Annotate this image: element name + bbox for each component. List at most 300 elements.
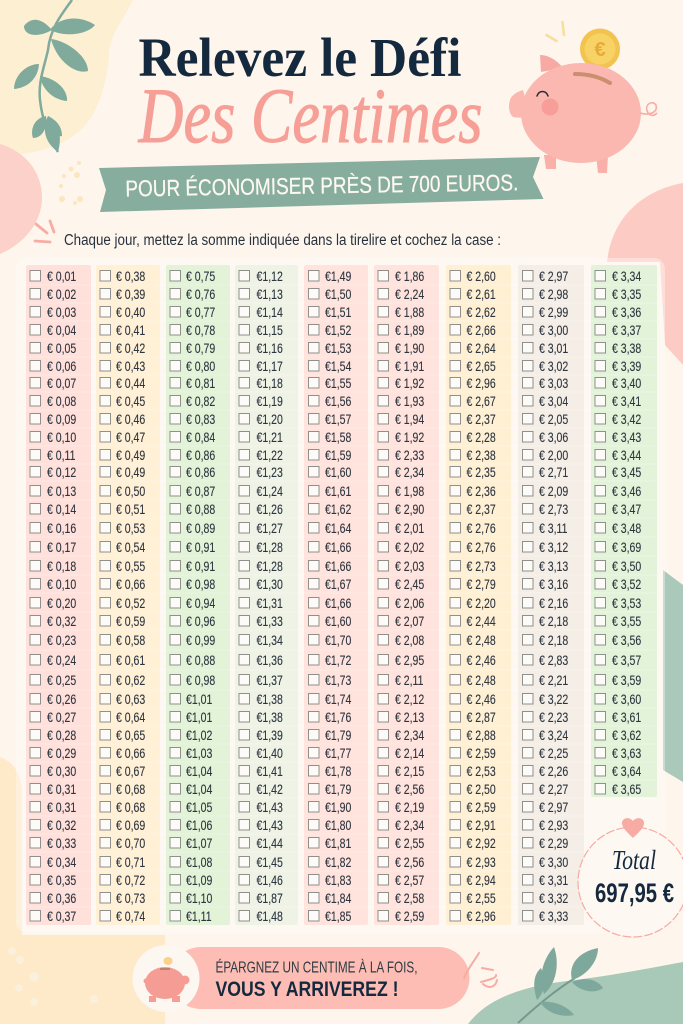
column 7: € 2,53 bbox=[466, 764, 496, 779]
column 2: € 0,42 bbox=[116, 341, 145, 356]
column 3: € 0,84 bbox=[186, 430, 215, 445]
column 1: € 0,33 bbox=[47, 836, 76, 851]
checkboxes column 9 bbox=[595, 270, 606, 794]
column 8: € 2,98 bbox=[539, 287, 568, 302]
column 8: € 3,33 bbox=[539, 909, 568, 924]
column 8: € 2,18 bbox=[539, 633, 568, 648]
column 8: € 3,01 bbox=[539, 341, 568, 356]
column 5: €1,58 bbox=[325, 430, 352, 445]
column 9: € 3,39 bbox=[612, 359, 641, 374]
column 8: € 3,11 bbox=[539, 521, 568, 536]
column 5: €1,66 bbox=[325, 540, 352, 555]
column 8: € 3,22 bbox=[539, 692, 568, 707]
column 4: €1,46 bbox=[256, 873, 283, 888]
column 1: € 0,08 bbox=[47, 394, 76, 409]
column 4: €1,22 bbox=[256, 448, 283, 463]
column 8: € 2,23 bbox=[539, 710, 568, 725]
column 3: € 0,88 bbox=[186, 502, 215, 517]
column 7: € 2,35 bbox=[466, 465, 496, 480]
background blob: top-left yellow bbox=[0, 0, 133, 156]
column 6: € 2,15 bbox=[395, 764, 424, 779]
column 3: €1,09 bbox=[186, 873, 213, 888]
column 5: €1,60 bbox=[325, 465, 352, 480]
column 6: € 2,03 bbox=[395, 559, 424, 574]
column 6: € 2,14 bbox=[395, 746, 424, 761]
column 9: € 3,53 bbox=[612, 596, 641, 611]
column 1: € 0,20 bbox=[47, 596, 76, 611]
column 7: € 2,50 bbox=[466, 782, 496, 797]
column 5: €1,52 bbox=[325, 323, 352, 338]
speckle dots bbox=[8, 947, 98, 1006]
column 4: €1,39 bbox=[256, 728, 283, 743]
column 4: €1,13 bbox=[256, 287, 283, 302]
column 3: € 0,86 bbox=[186, 448, 215, 463]
column 5: €1,79 bbox=[325, 728, 352, 743]
column 6: € 2,12 bbox=[395, 692, 424, 707]
column 2: € 0,41 bbox=[116, 323, 145, 338]
column 9: € 3,48 bbox=[612, 521, 641, 536]
column 7: € 2,20 bbox=[466, 596, 496, 611]
column 7: € 2,88 bbox=[466, 728, 496, 743]
column 5: €1,57 bbox=[325, 412, 352, 427]
column 9: € 3,59 bbox=[612, 673, 641, 688]
column 4: €1,42 bbox=[256, 782, 283, 797]
checkboxes column 2 bbox=[100, 270, 110, 921]
column 1 bbox=[30, 269, 76, 924]
column 7: € 2,87 bbox=[466, 710, 496, 725]
column 5: €1,49 bbox=[325, 269, 352, 284]
column 4: €1,15 bbox=[256, 323, 283, 338]
column 4: €1,27 bbox=[256, 521, 283, 536]
column 1: € 0,07 bbox=[47, 376, 76, 391]
column 6: € 1,92 bbox=[395, 376, 424, 391]
column 4 bbox=[239, 269, 283, 924]
column 2: € 0,66 bbox=[116, 577, 145, 592]
column 6: € 1,89 bbox=[395, 323, 424, 338]
title: Des Centimes: Des Centimes bbox=[138, 72, 482, 159]
column 9: € 3,36 bbox=[612, 305, 641, 320]
column 5: €1,78 bbox=[325, 764, 352, 779]
icon: small piggy in circle bbox=[132, 945, 200, 1012]
column 1: € 0,37 bbox=[47, 909, 76, 924]
column 4: €1,38 bbox=[256, 692, 283, 707]
column 3: €1,08 bbox=[186, 855, 213, 870]
column 6: € 2,57 bbox=[395, 873, 424, 888]
column 4: €1,31 bbox=[256, 596, 283, 611]
column 5: €1,55 bbox=[325, 376, 352, 391]
column 3: € 0,91 bbox=[186, 540, 215, 555]
column 3: €1,07 bbox=[186, 836, 213, 851]
column 6: € 1,94 bbox=[395, 412, 424, 427]
column 2: € 0,46 bbox=[116, 412, 145, 427]
banner ribbon bbox=[99, 157, 544, 212]
column 7: € 2,37 bbox=[466, 502, 496, 517]
column 8: € 3,02 bbox=[539, 359, 568, 374]
column 1: € 0,27 bbox=[47, 710, 76, 725]
column 2: € 0,55 bbox=[116, 559, 145, 574]
column 2: € 0,63 bbox=[116, 692, 145, 707]
column 2: € 0,58 bbox=[116, 633, 145, 648]
column 3: €1,01 bbox=[186, 692, 213, 707]
column 2: € 0,40 bbox=[116, 305, 145, 320]
column 3: €1,10 bbox=[186, 891, 213, 906]
column 7: € 2,60 bbox=[466, 269, 496, 284]
column 9: € 3,34 bbox=[612, 269, 641, 284]
pill text line 1: ÉPARGNEZ UN CENTIME À LA FOIS, bbox=[216, 960, 418, 976]
column 3: € 0,88 bbox=[186, 653, 215, 668]
column 4: €1,23 bbox=[256, 465, 283, 480]
column 9: € 3,42 bbox=[612, 412, 641, 427]
column 6: € 1,88 bbox=[395, 305, 424, 320]
column 5: €1,54 bbox=[325, 359, 352, 374]
column 5: €1,61 bbox=[325, 484, 352, 499]
column 5: €1,81 bbox=[325, 836, 352, 851]
column 1: € 0,30 bbox=[47, 764, 76, 779]
column 7: € 2,66 bbox=[466, 323, 496, 338]
column 8: € 3,03 bbox=[539, 376, 568, 391]
column 7: € 2,37 bbox=[466, 412, 496, 427]
banner text: POUR ÉCONOMISER PRÈS DE 700 EUROS. bbox=[125, 169, 519, 201]
column 7: € 2,79 bbox=[466, 577, 496, 592]
column 6: € 1,93 bbox=[395, 394, 424, 409]
column 5: €1,62 bbox=[325, 502, 352, 517]
column 5: €1,85 bbox=[325, 909, 352, 924]
column 8: € 3,06 bbox=[539, 430, 568, 445]
column 5: €1,72 bbox=[325, 653, 352, 668]
column 7: € 2,62 bbox=[466, 305, 496, 320]
column 7: € 2,96 bbox=[466, 376, 496, 391]
title: Relevez le Défi: Relevez le Défi bbox=[138, 27, 462, 88]
column 8: € 2,27 bbox=[539, 782, 568, 797]
checkboxes column 1 bbox=[30, 270, 40, 921]
column 3 bbox=[170, 269, 215, 924]
column 1: € 0,12 bbox=[47, 465, 76, 480]
column 4: €1,17 bbox=[256, 359, 283, 374]
column 5: €1,73 bbox=[325, 673, 352, 688]
column 5 bbox=[308, 269, 352, 924]
column 1: € 0,36 bbox=[47, 891, 76, 906]
column 2: € 0,51 bbox=[116, 502, 145, 517]
column 5: €1,83 bbox=[325, 873, 352, 888]
column 2: € 0,73 bbox=[116, 891, 145, 906]
column 7: € 2,91 bbox=[466, 818, 496, 833]
column 5: €1,80 bbox=[325, 818, 352, 833]
column 2: € 0,65 bbox=[116, 728, 145, 743]
checkboxes column 6 bbox=[378, 270, 388, 921]
column 6: € 2,11 bbox=[395, 673, 424, 688]
column 5: €1,84 bbox=[325, 891, 352, 906]
checkboxes column 4 bbox=[239, 270, 250, 921]
column 6: € 2,06 bbox=[395, 596, 424, 611]
column 8: € 3,13 bbox=[539, 559, 568, 574]
column 3: € 0,77 bbox=[186, 305, 215, 320]
column 3: € 0,99 bbox=[186, 633, 215, 648]
column 1: € 0,23 bbox=[47, 633, 76, 648]
column 7: € 2,48 bbox=[466, 633, 496, 648]
column 6: € 2,08 bbox=[395, 633, 424, 648]
column 9: € 3,50 bbox=[612, 559, 641, 574]
column 6: € 1,92 bbox=[395, 430, 424, 445]
column 3: € 0,96 bbox=[186, 614, 215, 629]
column 2: € 0,64 bbox=[116, 710, 145, 725]
column 7: € 2,65 bbox=[466, 359, 496, 374]
column 3: € 0,89 bbox=[186, 521, 215, 536]
column 9: € 3,62 bbox=[612, 728, 641, 743]
column 6: € 2,33 bbox=[395, 448, 424, 463]
column 9: € 3,44 bbox=[612, 448, 641, 463]
column 5: €1,82 bbox=[325, 855, 352, 870]
column 4: €1,28 bbox=[256, 540, 283, 555]
icon: pink accent strokes bbox=[35, 221, 54, 242]
background blob: bottom-right teal bbox=[468, 962, 683, 1024]
column 1: € 0,32 bbox=[47, 614, 76, 629]
column 3: € 0,98 bbox=[186, 577, 215, 592]
column 3: €1,04 bbox=[186, 782, 213, 797]
column 9: € 3,35 bbox=[612, 287, 641, 302]
column 6: € 1,98 bbox=[395, 484, 424, 499]
column 5: €1,53 bbox=[325, 341, 352, 356]
column 9: € 3,38 bbox=[612, 341, 641, 356]
column 1: € 0,16 bbox=[47, 521, 76, 536]
column 6: € 2,59 bbox=[395, 909, 424, 924]
column 7: € 2,48 bbox=[466, 673, 496, 688]
column 7: € 2,36 bbox=[466, 484, 496, 499]
column 4: €1,16 bbox=[256, 341, 283, 356]
column 7: € 2,64 bbox=[466, 341, 496, 356]
column 2: € 0,61 bbox=[116, 653, 145, 668]
column 8: € 2,00 bbox=[539, 448, 568, 463]
column 3: € 0,80 bbox=[186, 359, 215, 374]
background blob: right pink bbox=[607, 183, 683, 365]
column 8: € 2,18 bbox=[539, 614, 568, 629]
column 5: €1,50 bbox=[325, 287, 352, 302]
column 3: €1,05 bbox=[186, 800, 213, 815]
column 8: € 2,25 bbox=[539, 746, 568, 761]
column 4: €1,43 bbox=[256, 818, 283, 833]
column 4: €1,26 bbox=[256, 502, 283, 517]
column 4: €1,43 bbox=[256, 800, 283, 815]
column 1: € 0,29 bbox=[47, 746, 76, 761]
column 8: € 3,31 bbox=[539, 873, 568, 888]
column 2: € 0,45 bbox=[116, 394, 145, 409]
column 1: € 0,32 bbox=[47, 818, 76, 833]
column 4: €1,36 bbox=[256, 653, 283, 668]
column 3: € 0,76 bbox=[186, 287, 215, 302]
column 6: € 1,91 bbox=[395, 359, 424, 374]
column 7: € 2,73 bbox=[466, 559, 496, 574]
column 1: € 0,28 bbox=[47, 728, 76, 743]
column 3: € 0,83 bbox=[186, 412, 215, 427]
column 4: €1,87 bbox=[256, 891, 283, 906]
column 7: € 2,93 bbox=[466, 855, 496, 870]
column 2: € 0,70 bbox=[116, 836, 145, 851]
column 1: € 0,05 bbox=[47, 341, 76, 356]
footer pill bbox=[132, 945, 470, 1012]
column 6: € 1,90 bbox=[395, 341, 424, 356]
column 9: € 3,40 bbox=[612, 376, 641, 391]
column 5: €1,67 bbox=[325, 577, 352, 592]
background blob: right teal bbox=[663, 570, 683, 782]
column 6: € 2,34 bbox=[395, 465, 424, 480]
column 3: € 0,98 bbox=[186, 673, 215, 688]
column 1: € 0,26 bbox=[47, 692, 76, 707]
column 2: € 0,66 bbox=[116, 746, 145, 761]
column 3: €1,11 bbox=[186, 909, 212, 924]
column 3: € 0,86 bbox=[186, 465, 215, 480]
column 8: € 3,16 bbox=[539, 577, 568, 592]
column 2: € 0,39 bbox=[116, 287, 145, 302]
column 6: € 2,58 bbox=[395, 891, 424, 906]
column 6: € 2,02 bbox=[395, 540, 424, 555]
column 6: € 2,56 bbox=[395, 782, 424, 797]
column 7: € 2,59 bbox=[466, 800, 496, 815]
column 8: € 2,97 bbox=[539, 800, 568, 815]
column 9: € 3,56 bbox=[612, 633, 641, 648]
column 3: € 0,82 bbox=[186, 394, 215, 409]
column 3: € 0,91 bbox=[186, 559, 215, 574]
column 4: €1,33 bbox=[256, 614, 283, 629]
column 1: € 0,03 bbox=[47, 305, 76, 320]
column 5: €1,60 bbox=[325, 614, 352, 629]
column 9: € 3,65 bbox=[612, 782, 641, 797]
column 5: €1,79 bbox=[325, 782, 352, 797]
column 7: € 2,46 bbox=[466, 653, 496, 668]
column 9 bbox=[595, 269, 641, 797]
total label: Total bbox=[612, 845, 656, 875]
column 4: €1,38 bbox=[256, 710, 283, 725]
column 1: € 0,17 bbox=[47, 540, 76, 555]
column 9: € 3,57 bbox=[612, 653, 641, 668]
column 8: € 3,04 bbox=[539, 394, 568, 409]
column 4: €1,21 bbox=[256, 430, 283, 445]
column 2: € 0,59 bbox=[116, 614, 145, 629]
column 5: €1,66 bbox=[325, 596, 352, 611]
column 1: € 0,01 bbox=[47, 269, 76, 284]
column 5: €1,56 bbox=[325, 394, 352, 409]
column 2 bbox=[100, 269, 145, 924]
column 9: € 3,47 bbox=[612, 502, 641, 517]
column 5: €1,90 bbox=[325, 800, 352, 815]
column 1: € 0,35 bbox=[47, 873, 76, 888]
column 4: €1,19 bbox=[256, 394, 283, 409]
column 4: €1,37 bbox=[256, 673, 283, 688]
column 6: € 2,13 bbox=[395, 710, 424, 725]
column 9: € 3,52 bbox=[612, 577, 641, 592]
column 8 bbox=[522, 269, 568, 924]
column 7: € 2,59 bbox=[466, 746, 496, 761]
column 4: €1,44 bbox=[256, 836, 283, 851]
column 6: € 2,01 bbox=[395, 521, 424, 536]
column 6: € 2,55 bbox=[395, 836, 424, 851]
column 2: € 0,72 bbox=[116, 873, 145, 888]
column 8: € 3,24 bbox=[539, 728, 568, 743]
column 4: €1,18 bbox=[256, 376, 283, 391]
column 7: € 2,76 bbox=[466, 540, 496, 555]
column 6: € 1,86 bbox=[395, 269, 424, 284]
checkboxes column 3 bbox=[170, 270, 180, 921]
column 9: € 3,55 bbox=[612, 614, 641, 629]
column 9: € 3,60 bbox=[612, 692, 641, 707]
column 8: € 2,73 bbox=[539, 502, 568, 517]
column 7: € 2,76 bbox=[466, 521, 496, 536]
column 2: € 0,69 bbox=[116, 818, 145, 833]
column 8: € 2,97 bbox=[539, 269, 568, 284]
coin bbox=[580, 28, 620, 70]
column 4: €1,48 bbox=[256, 909, 283, 924]
column 5: €1,64 bbox=[325, 521, 352, 536]
column 1: € 0,24 bbox=[47, 653, 76, 668]
background blob: left pink bbox=[0, 144, 42, 254]
column 9: € 3,63 bbox=[612, 746, 641, 761]
column 4: €1,20 bbox=[256, 412, 283, 427]
column 5: €1,51 bbox=[325, 305, 352, 320]
column 4: €1,34 bbox=[256, 633, 283, 648]
column 9: € 3,43 bbox=[612, 430, 641, 445]
column 9: € 3,46 bbox=[612, 484, 641, 499]
column 1: € 0,31 bbox=[47, 800, 76, 815]
column 3: € 0,94 bbox=[186, 596, 215, 611]
column 6: € 2,34 bbox=[395, 728, 424, 743]
icon: leaf branch bottom-right bbox=[518, 947, 603, 1023]
column 4: €1,14 bbox=[256, 305, 283, 320]
column 6: € 2,45 bbox=[395, 577, 424, 592]
icon: heart bbox=[622, 818, 644, 838]
icon: leaf branch top-left bbox=[14, 0, 95, 152]
column 2: € 0,68 bbox=[116, 800, 145, 815]
column 3: € 0,78 bbox=[186, 323, 215, 338]
coin: € bbox=[594, 39, 606, 61]
column 7: € 2,96 bbox=[466, 909, 496, 924]
column 2: € 0,53 bbox=[116, 521, 145, 536]
column 2: € 0,47 bbox=[116, 430, 145, 445]
column 8: € 2,16 bbox=[539, 596, 568, 611]
column 2: € 0,54 bbox=[116, 540, 145, 555]
column 6: € 2,24 bbox=[395, 287, 424, 302]
column 8: € 2,83 bbox=[539, 653, 568, 668]
column 2: € 0,62 bbox=[116, 673, 145, 688]
column 4: €1,12 bbox=[256, 269, 283, 284]
column 1: € 0,11 bbox=[47, 448, 76, 463]
column 5: €1,66 bbox=[325, 559, 352, 574]
column 9: € 3,64 bbox=[612, 764, 641, 779]
column 2: € 0,43 bbox=[116, 359, 145, 374]
column 1: € 0,14 bbox=[47, 502, 76, 517]
column 3: €1,06 bbox=[186, 818, 213, 833]
column 7: € 2,94 bbox=[466, 873, 496, 888]
column 6: € 2,07 bbox=[395, 614, 424, 629]
column 1: € 0,02 bbox=[47, 287, 76, 302]
pill text line 2: VOUS Y ARRIVEREZ ! bbox=[216, 977, 398, 1001]
column 3: € 0,87 bbox=[186, 484, 215, 499]
column 1: € 0,13 bbox=[47, 484, 76, 499]
column 6: € 2,90 bbox=[395, 502, 424, 517]
column 8: € 2,05 bbox=[539, 412, 568, 427]
column 1: € 0,04 bbox=[47, 323, 76, 338]
column 5: €1,59 bbox=[325, 448, 352, 463]
column 1: € 0,10 bbox=[47, 430, 76, 445]
column 2: € 0,49 bbox=[116, 448, 145, 463]
column 4: €1,45 bbox=[256, 855, 283, 870]
column 8: € 3,00 bbox=[539, 323, 568, 338]
column 9: € 3,61 bbox=[612, 710, 641, 725]
instruction text: Chaque jour, mettez la somme indiquée dans la tirelire et cochez la case : bbox=[64, 232, 501, 249]
column 7: € 2,46 bbox=[466, 692, 496, 707]
column 6: € 2,95 bbox=[395, 653, 424, 668]
column 9: € 3,41 bbox=[612, 394, 641, 409]
column 2: € 0,52 bbox=[116, 596, 145, 611]
column 2: € 0,49 bbox=[116, 465, 145, 480]
column 1: € 0,06 bbox=[47, 359, 76, 374]
